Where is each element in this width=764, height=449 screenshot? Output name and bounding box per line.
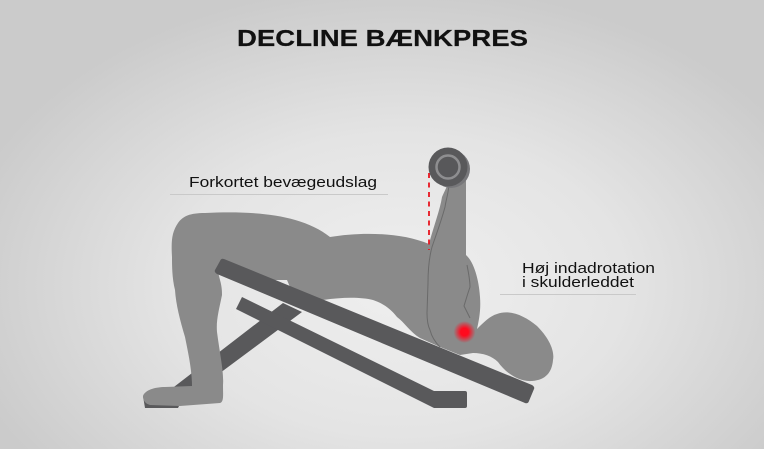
callout text line 1: Høj indadrotation [522, 261, 655, 277]
callout: high internal rotation [500, 261, 655, 294]
athlete body [143, 180, 553, 406]
dumbbell inner ring [436, 156, 460, 178]
chest contour line [427, 185, 449, 347]
title: DECLINE BÆNKPRES [237, 25, 528, 51]
bench top board [215, 259, 534, 403]
dumbbell rear plate [432, 150, 470, 188]
bench strut and foot plate [143, 303, 302, 408]
callout rule [500, 294, 636, 296]
torso, leg and arm silhouette [143, 180, 553, 406]
dumbbell [428, 148, 470, 188]
pain marker [454, 321, 476, 343]
callout text: Forkortet bevægeudslag [189, 175, 377, 191]
dashed range-of-motion line [428, 173, 430, 250]
callout text line 2: i skulderleddet [522, 275, 634, 291]
callout rule [170, 194, 388, 196]
bench lower support bar [236, 297, 467, 408]
dumbbell front plate [428, 148, 468, 186]
shoulder contour line [464, 265, 470, 318]
